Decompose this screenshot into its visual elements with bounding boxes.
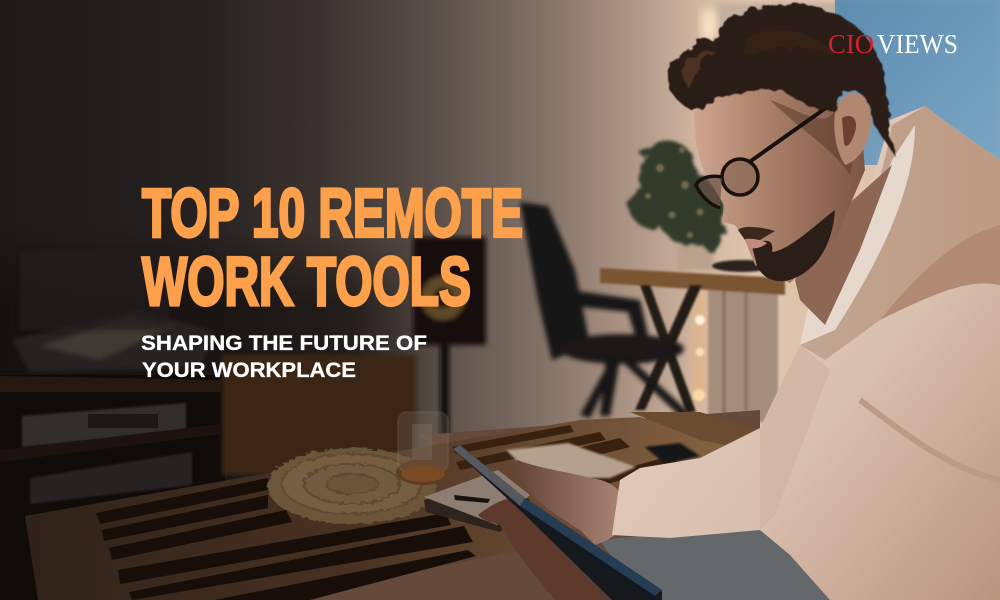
background desk and curtain <box>600 268 785 422</box>
notebook and pen <box>424 470 530 532</box>
white pad <box>506 443 636 478</box>
title: TOP 10 REMOTE <box>142 174 523 252</box>
background room wall <box>126 0 1000 448</box>
shelf unit and wood cabinet <box>0 250 416 600</box>
hoodie body and sleeve <box>612 106 1000 600</box>
office chair <box>520 202 692 418</box>
window edge fill <box>835 0 1000 165</box>
logo: CIO Views <box>828 29 958 59</box>
window and curtain <box>715 3 997 170</box>
man in hoodie <box>612 85 1000 600</box>
tablet <box>453 445 662 600</box>
string lights glow <box>693 10 716 401</box>
subtitle <box>141 332 427 382</box>
glasses <box>696 105 830 208</box>
title <box>142 174 523 320</box>
potted plant <box>629 141 772 272</box>
subtitle: SHAPING THE FUTURE OF <box>141 332 427 355</box>
woven placemat <box>267 448 437 524</box>
logo: CIO Views: CIO <box>828 29 874 59</box>
glass of tea <box>396 412 450 485</box>
slatted wooden table <box>25 412 760 600</box>
jeans <box>600 525 835 600</box>
hair <box>669 4 896 158</box>
neck <box>795 165 892 325</box>
beard <box>752 210 835 281</box>
title: WORK TOOLS <box>142 243 471 320</box>
subtitle: YOUR WORKPLACE <box>142 359 356 382</box>
inner hood light band <box>800 125 915 345</box>
face <box>694 85 865 283</box>
ear <box>834 93 871 165</box>
speaker on stand <box>413 237 486 437</box>
smartphone on table <box>645 443 700 464</box>
hand on tablet <box>478 460 627 600</box>
logo: CIO Views: VIEWS <box>877 29 958 59</box>
sleeve fold shading <box>760 345 830 530</box>
floor <box>300 410 760 600</box>
hood fold <box>800 106 1000 360</box>
